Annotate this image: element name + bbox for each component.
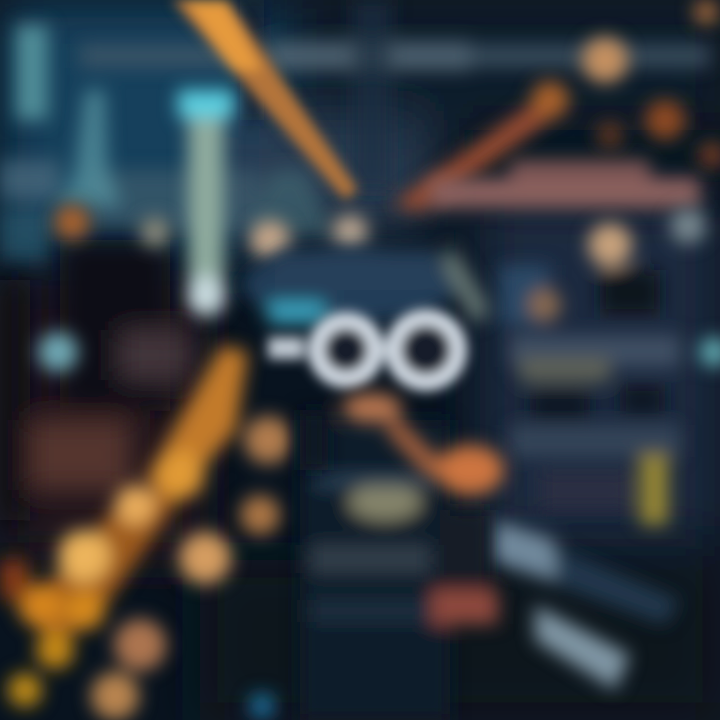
pink band (430, 160, 700, 208)
upper skyline band (0, 0, 710, 260)
left bokeh lights (38, 204, 368, 372)
character body (300, 420, 498, 720)
orange-red streak (392, 0, 720, 212)
right buildings (490, 208, 720, 690)
left dark building (0, 240, 190, 520)
character (242, 245, 504, 720)
central teal tower (178, 90, 234, 316)
orange streak upper (172, 0, 358, 200)
character hat (242, 245, 490, 325)
lower-left orange lights (0, 345, 292, 720)
left teal tower (16, 25, 48, 120)
character glasses (268, 317, 459, 383)
bottom blue light (249, 693, 275, 719)
character face (300, 393, 504, 495)
